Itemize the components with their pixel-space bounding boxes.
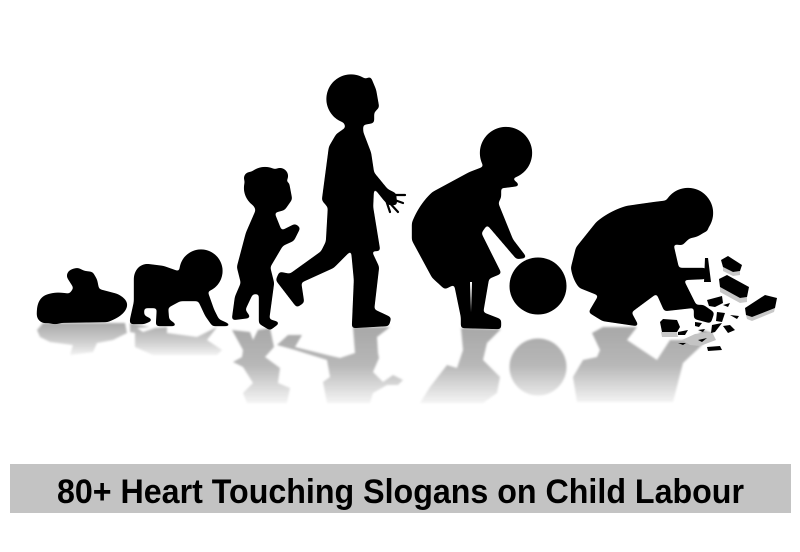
rubble pieces — [678, 296, 739, 351]
gap between the legs — [470, 282, 472, 312]
reflection: walking boy — [277, 327, 403, 403]
title bar — [10, 464, 791, 513]
bricks and rubble — [660, 256, 777, 351]
hand fingers — [386, 195, 405, 212]
silhouette: toddler — [233, 167, 299, 329]
rubble reflection — [682, 332, 716, 346]
reflection: boy with ball — [420, 328, 501, 403]
reflection: ball — [510, 338, 566, 396]
reflection: newborn — [37, 323, 127, 355]
reflections on the floor — [37, 323, 713, 403]
hammer head — [704, 258, 711, 282]
silhouette: walking boy — [277, 74, 405, 327]
brick: middle — [719, 275, 749, 298]
brick: left — [660, 319, 680, 332]
title: 80+ Heart Touching Slogans on Child Labour — [57, 473, 744, 511]
reflection: crawling baby — [130, 323, 222, 355]
brick: top — [721, 256, 742, 272]
silhouette: crouching boy with hammer — [572, 188, 713, 325]
reflection: toddler — [232, 328, 290, 403]
brick shadows — [661, 267, 775, 337]
reflection: working boy — [573, 327, 713, 402]
silhouette: newborn on its back — [38, 269, 126, 324]
silhouette: crawling baby — [131, 250, 229, 325]
brick: right — [745, 295, 777, 317]
silhouette: boy bouncing a ball — [413, 127, 532, 328]
ball — [510, 258, 566, 314]
